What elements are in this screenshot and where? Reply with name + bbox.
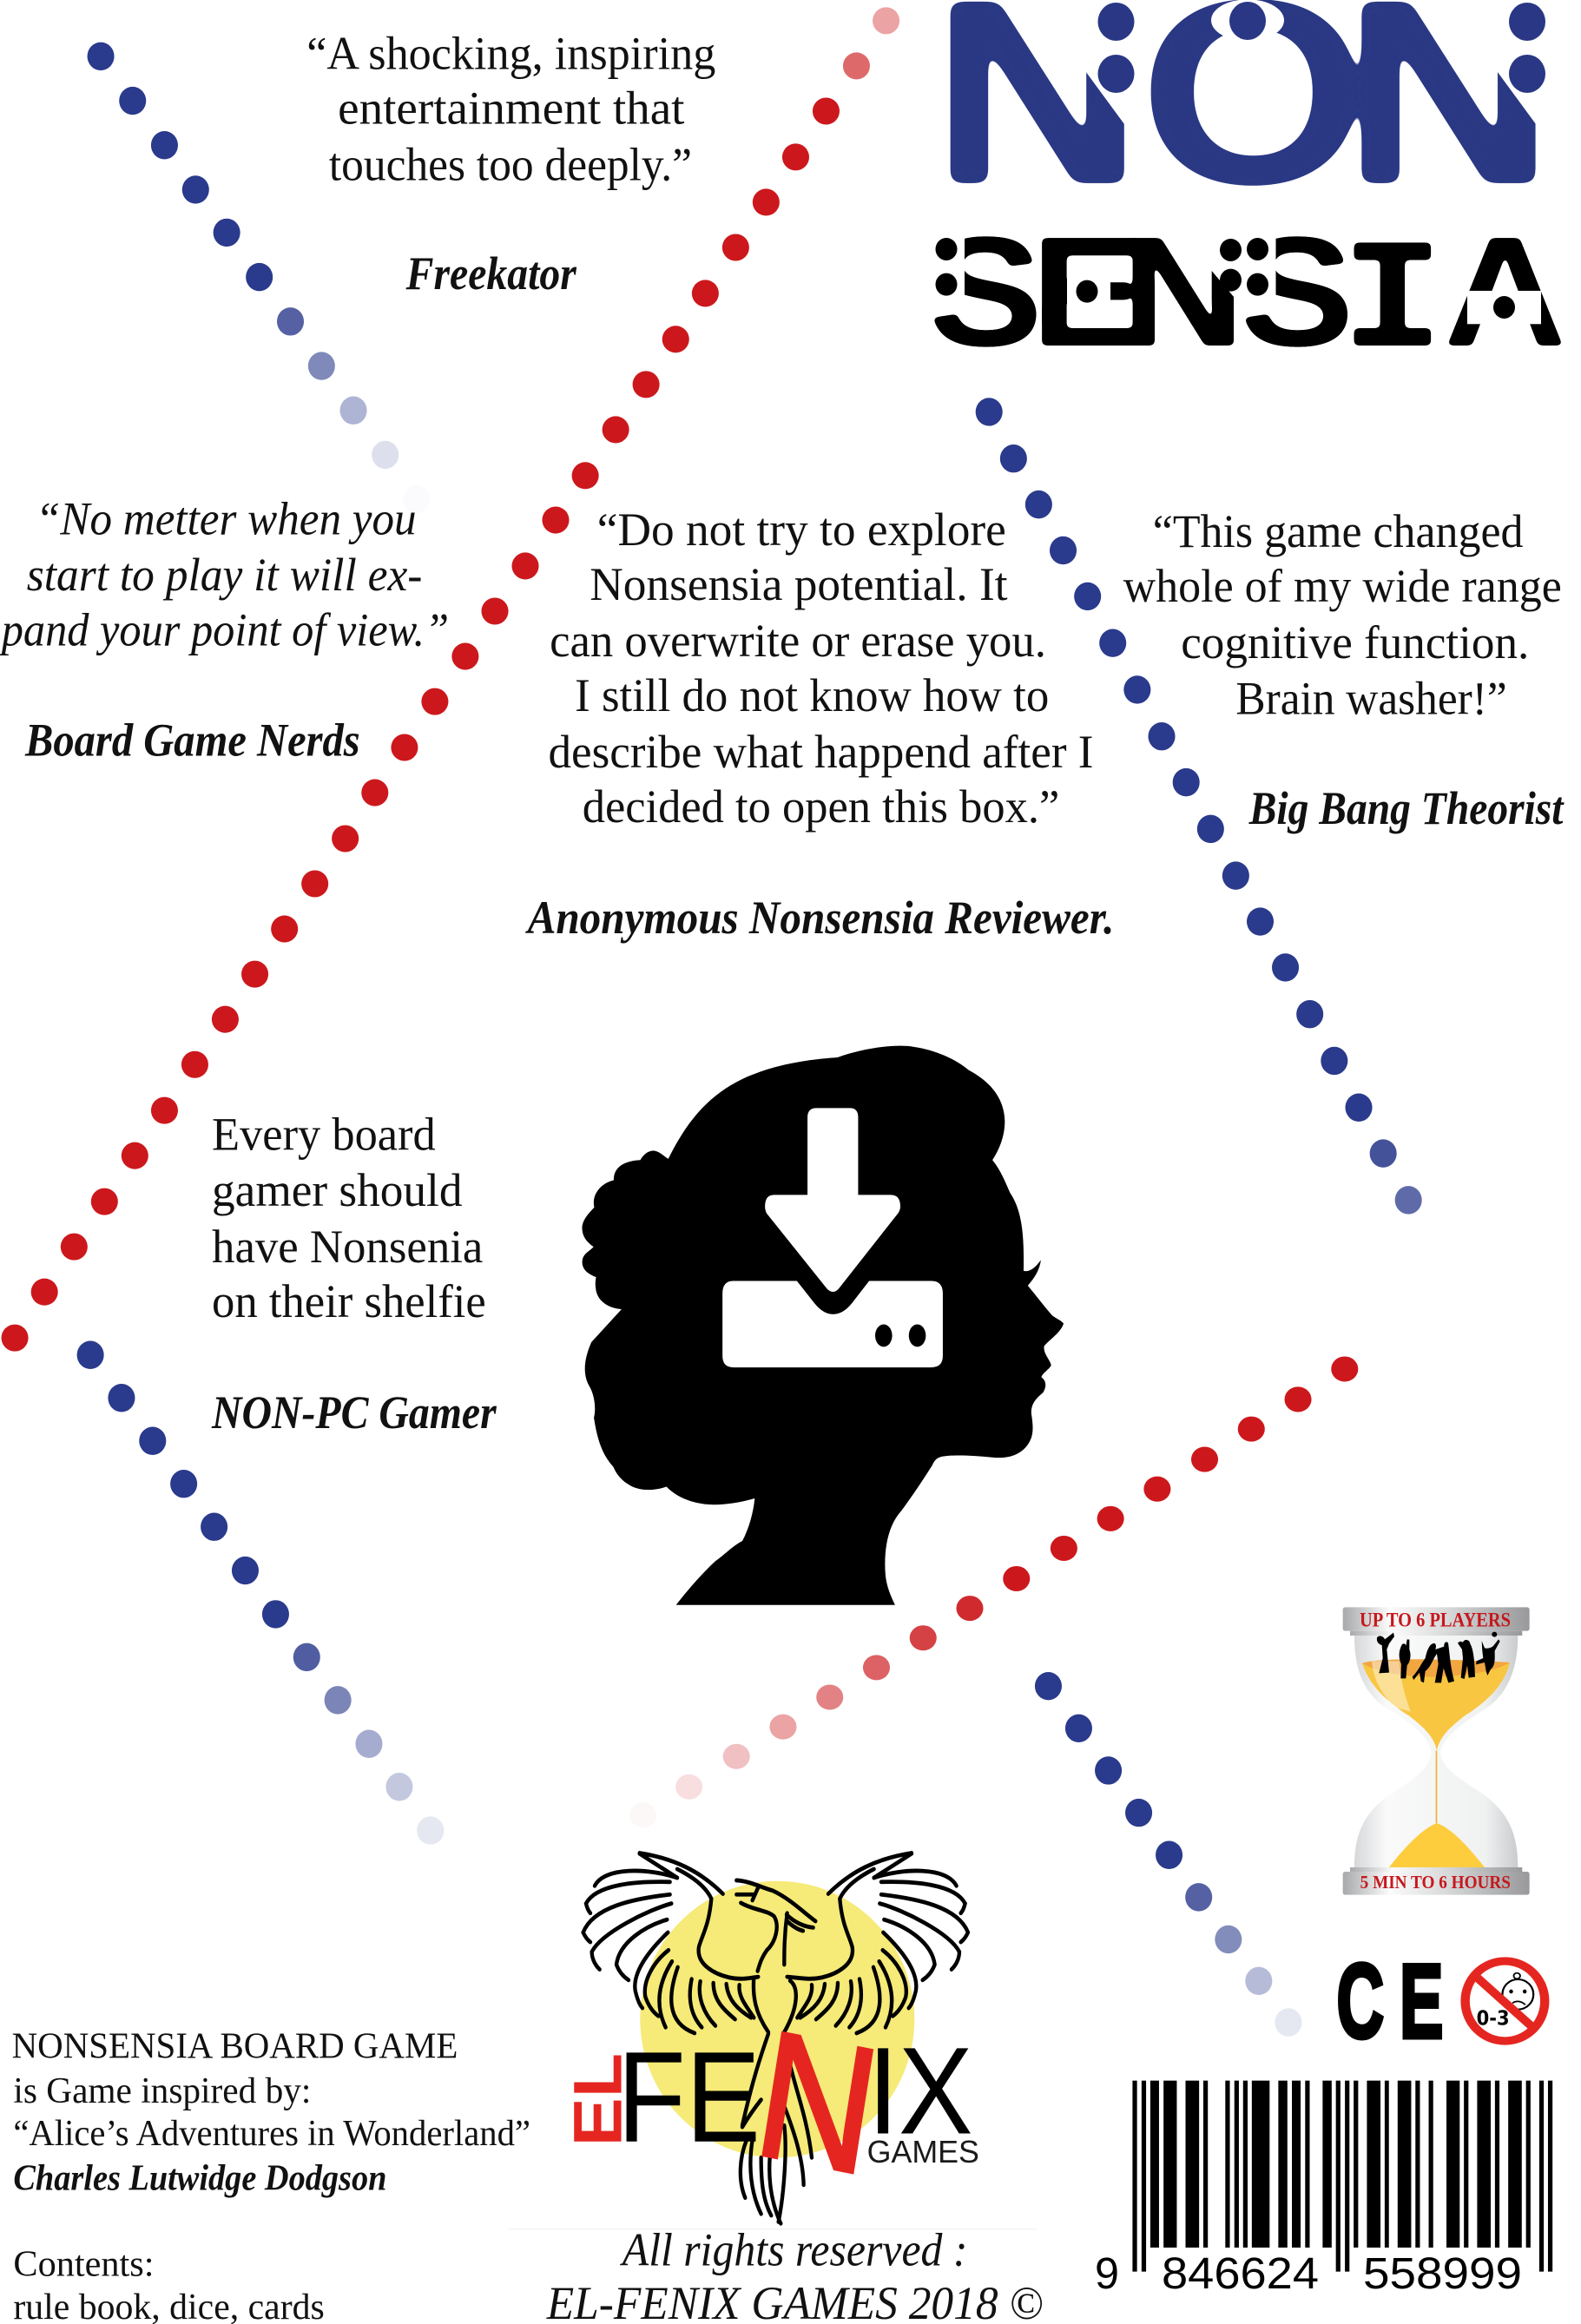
upper sand — [1362, 1659, 1510, 1751]
metal caps — [1350, 1631, 1522, 1636]
quote: Big Bang Theorist: “This game changed — [1153, 505, 1524, 557]
lower sand — [1389, 1823, 1485, 1867]
quote: Freekator — [306, 27, 715, 300]
barcode: 9 — [1095, 2248, 1119, 2298]
wordmark IX: IX — [867, 2021, 973, 2160]
quote: NON-PC Gamer: Every board — [212, 1108, 436, 1160]
quote: NON-PC Gamer: NON-PC Gamer — [211, 1386, 497, 1439]
icon: woman silhouette with download symbol — [583, 1046, 1064, 1605]
quote: Anonymous Nonsensia Reviewer: I still do not know how to — [575, 669, 1049, 721]
logo: SENSIA wordmark — [928, 205, 1567, 392]
logo: SENSIA wordmark: I — [1341, 215, 1444, 392]
dotted line: blue lower left — [77, 1341, 444, 1845]
quote: Anonymous Nonsensia Reviewer: Anonymous Nonsensia Reviewer. — [525, 892, 1114, 944]
quote: Big Bang Theorist: cognitive function. — [1181, 616, 1529, 668]
quote: Freekator: “A shocking, inspiring — [306, 27, 715, 79]
wordmark EL: EL — [559, 2053, 636, 2146]
icon: hourglass badge — [1343, 1607, 1530, 1895]
yellow sun — [640, 1881, 914, 2157]
phoenix head, body and tail — [736, 1880, 815, 2223]
icon: hourglass badge: 5 MIN TO 6 HOURS — [1360, 1872, 1511, 1893]
text: game credits: is Game inspired by: — [13, 2071, 311, 2111]
barcode: 846624 — [1162, 2248, 1319, 2298]
text: game credits: Charles Lutwidge Dodgson — [13, 2157, 386, 2198]
quote: NON-PC Gamer: on their shelfie — [212, 1275, 486, 1327]
quote: Freekator: touches too deeply.” — [329, 138, 692, 190]
quote: Board Game Nerds: pand your point of view.” — [0, 603, 449, 655]
dotted line: blue top left — [88, 43, 430, 513]
quote: Anonymous Nonsensia Reviewer: can overwrite or erase you. — [550, 615, 1046, 667]
quote: Board Game Nerds: “No metter when you — [36, 492, 417, 544]
quote: Anonymous Nonsensia Reviewer: Nonsensia potential. It — [590, 558, 1008, 610]
quote: Anonymous Nonsensia Reviewer: describe what happend after I — [548, 726, 1094, 778]
quote: Board Game Nerds — [0, 492, 449, 766]
hourglass glass — [1354, 1636, 1518, 1867]
quote: Board Game Nerds: Board Game Nerds — [24, 714, 360, 766]
logo: SENSIA wordmark: SENS — [928, 205, 1354, 379]
quote: Freekator: entertainment that — [338, 82, 685, 135]
quote: Big Bang Theorist: whole of my wide range — [1123, 560, 1562, 612]
icon: not for children 0-3 — [1466, 1961, 1545, 2041]
icon: CE mark: CE — [1336, 1941, 1443, 2060]
text: rights notice: All rights reserved : — [620, 2223, 967, 2275]
icon: not for children 0-3: 0-3 — [1477, 2007, 1510, 2030]
barcode — [1095, 2081, 1552, 2298]
quote: NON-PC Gamer: have Nonsenia — [212, 1221, 483, 1273]
quote: NON-PC Gamer: gamer should — [212, 1164, 463, 1216]
icon: hourglass badge: UP TO 6 PLAYERS — [1360, 1609, 1511, 1631]
wordmark FE: FE — [617, 2025, 761, 2169]
dotted line: blue bottom right — [1035, 1672, 1301, 2037]
quote: Anonymous Nonsensia Reviewer — [525, 504, 1114, 944]
quote: Freekator: Freekator — [405, 247, 577, 300]
dotted line: red lower right — [629, 1356, 1358, 1827]
quote: Big Bang Theorist: Brain washer!” — [1235, 673, 1507, 725]
wordmark N: N — [744, 1992, 891, 2213]
quote: Big Bang Theorist — [1123, 505, 1565, 834]
text: contents — [13, 2243, 325, 2324]
dotted line: blue right side — [976, 398, 1422, 1215]
phoenix right wing — [787, 1853, 968, 2033]
quote: Anonymous Nonsensia Reviewer: “Do not try to explore — [597, 504, 1006, 556]
text: game credits — [12, 2026, 530, 2198]
barcode: 558999 — [1363, 2248, 1522, 2298]
text: game credits: “Alice’s Adventures in Wonderland” — [13, 2113, 530, 2154]
text: rights notice — [546, 2223, 1043, 2324]
text: contents: Contents: — [13, 2243, 154, 2284]
dancing silhouettes — [1377, 1633, 1500, 1682]
quote: NON-PC Gamer — [211, 1108, 497, 1439]
wordmark GAMES: GAMES — [867, 2136, 979, 2170]
dotted line: red long diagonal — [2, 7, 899, 1352]
quote: Board Game Nerds: start to play it will ex- — [27, 549, 422, 601]
logo: El Fenix Games phoenix — [559, 1853, 979, 2223]
phoenix left wing — [583, 1853, 758, 2033]
text: game credits: NONSENSIA BOARD GAME — [12, 2026, 458, 2067]
logo: SENSIA wordmark: A — [1443, 205, 1567, 379]
quote: Anonymous Nonsensia Reviewer: decided to open this box.” — [583, 780, 1059, 833]
